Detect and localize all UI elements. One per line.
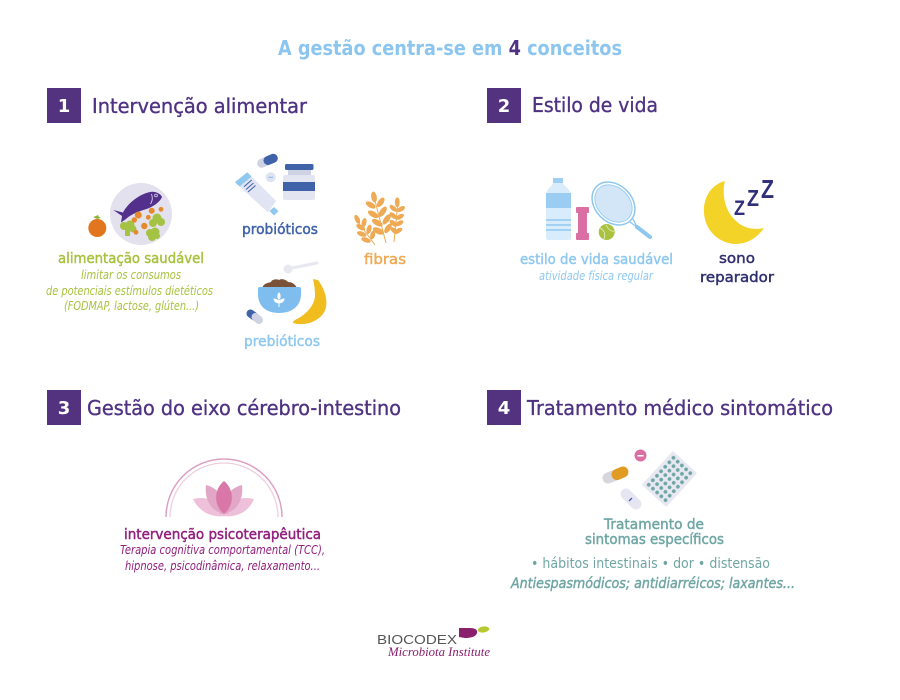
panel: 3 eixo cérebro-intestino <box>47 390 401 573</box>
icon: dumbbell <box>576 207 589 240</box>
psychotherapy text: Terapia cognitiva comportamental (TCC), <box>120 543 325 557</box>
icon: tennis racket <box>583 173 650 237</box>
icon: capsule <box>608 472 623 478</box>
icon: pink pill <box>634 450 646 462</box>
probiotics label: probióticos <box>242 222 318 238</box>
icon: zzz <box>734 174 774 220</box>
panel: 2 estilo de vida <box>487 88 774 286</box>
psychotherapy text: intervenção psicoterapêutica <box>124 527 321 543</box>
heading 1: Intervenção alimentar <box>92 94 308 118</box>
healthy diet text: (FODMAP, lactose, glúten...) <box>64 299 199 313</box>
healthy lifestyle text: estilo de vida saudável <box>520 252 673 268</box>
heading 1: 1 <box>58 96 70 117</box>
heading 2: 2 <box>498 96 510 117</box>
sleep label: reparador <box>700 270 774 286</box>
psychotherapy text: hipnose, psicodinâmica, relaxamento... <box>125 559 320 573</box>
healthy lifestyle text <box>520 252 673 283</box>
healthy diet text: limitar os consumos <box>81 268 181 282</box>
panel: 1 intervenção alimentar <box>46 88 406 350</box>
fibre label: fibras <box>364 252 406 268</box>
heading 4: 4 <box>498 398 510 419</box>
treatment text: sintomas específicos <box>585 532 724 548</box>
icon: blister pack <box>642 451 697 507</box>
sleep label <box>700 251 774 286</box>
panel: 4 tratamento médico <box>487 390 833 592</box>
heading 3 <box>47 390 401 425</box>
treatment text: • hábitos intestinais • dor • distensão <box>531 556 770 572</box>
icon: orange <box>88 215 106 237</box>
healthy lifestyle text: atividade física regular <box>539 269 654 283</box>
title: A gestão centra-se em 4 conceitos <box>278 36 622 60</box>
sleep label: sono <box>719 251 755 267</box>
icon: lotus <box>193 481 254 516</box>
heading 2: Estilo de vida <box>532 93 658 117</box>
icon: arcs <box>166 459 282 517</box>
treatment text: Tratamento de <box>603 517 704 533</box>
icon: healthy plate <box>110 183 172 245</box>
treatment text: Antiespasmódicos; antidiarréicos; laxantes... <box>510 576 795 592</box>
icon: water bottle <box>546 178 571 240</box>
logo: Biocodex Microbiota Institute <box>377 626 490 659</box>
icon: prebiotics <box>250 263 326 324</box>
icon: zzz: Z <box>761 174 774 204</box>
heading 1 <box>47 88 308 123</box>
icon: probiotics <box>235 158 315 216</box>
healthy diet text <box>46 251 213 313</box>
logo: Biocodex Microbiota Institute: Microbiota Institute <box>387 644 490 659</box>
heading 3: Gestão do eixo cérebro-intestino <box>87 396 401 420</box>
icon: white pill <box>626 494 636 504</box>
heading 4 <box>487 390 833 425</box>
icon: tennis ball <box>599 224 615 240</box>
heading 2 <box>487 88 658 123</box>
icon: zzz: Z <box>734 197 745 220</box>
icon: moon <box>704 181 764 244</box>
heading 4: Tratamento médico sintomático <box>526 396 833 420</box>
heading 3: 3 <box>58 398 70 419</box>
treatment text <box>510 517 795 592</box>
logo: Biocodex Microbiota Institute: BIOCODEX <box>377 633 458 647</box>
healthy diet text: alimentação saudável <box>58 251 204 267</box>
icon: wheat fibre <box>353 191 406 245</box>
healthy diet text: de potenciais estímulos dietéticos <box>46 284 213 298</box>
icon: zzz: Z <box>747 185 759 211</box>
prebiotics label: prebióticos <box>244 334 320 350</box>
psychotherapy text <box>120 527 325 573</box>
